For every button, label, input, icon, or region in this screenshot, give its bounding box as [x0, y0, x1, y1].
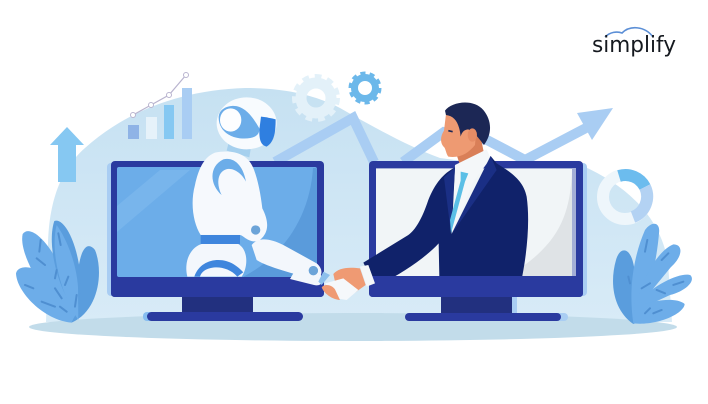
man's hand: [333, 268, 366, 293]
robot shoulder arc: [212, 159, 246, 195]
man neck: [457, 133, 484, 170]
man tie: [450, 172, 468, 233]
man's fingers: [322, 285, 340, 300]
plant: left: [16, 221, 99, 323]
donut chart: [603, 175, 647, 219]
robot head: [217, 97, 277, 149]
man ear: [468, 128, 477, 142]
bar chart with trend line: [128, 72, 192, 139]
man shirt: [452, 149, 491, 234]
robot's hand: [325, 278, 358, 300]
handshake: [309, 265, 375, 300]
logo text: simplify: [592, 33, 676, 58]
robot eye: [219, 106, 259, 139]
monitor: right: [369, 161, 587, 321]
icon: pale gear: [295, 77, 337, 119]
left monitor lower bezel: [111, 277, 324, 297]
robot torso: [193, 152, 267, 241]
robot hips: [186, 244, 246, 277]
man's cuff: [360, 265, 375, 287]
robot forearm: [252, 239, 321, 278]
man lapels: [444, 156, 497, 234]
icon: up arrow: [50, 127, 84, 182]
monitor: left: [107, 161, 324, 321]
businessman: [363, 103, 528, 287]
logo cloud: [605, 28, 653, 37]
robot forearm over bezel: [290, 262, 322, 285]
robot: [186, 97, 321, 278]
man suit: [363, 156, 528, 287]
ground shadow: [29, 313, 677, 341]
robot neck: [227, 144, 251, 157]
logo: [592, 28, 676, 58]
trend arrow: [275, 108, 613, 162]
icon: blue gear: [350, 74, 380, 102]
man hair: [445, 103, 490, 145]
robot hip ring: [194, 260, 243, 277]
man eye: [448, 128, 453, 134]
robot elbow joint: [251, 225, 260, 235]
plant: right: [613, 224, 692, 324]
robot ear: [259, 117, 276, 147]
background blob: [46, 88, 672, 322]
man face: [441, 112, 477, 157]
right monitor lower bezel: [369, 276, 583, 297]
robot belt: [201, 235, 240, 244]
